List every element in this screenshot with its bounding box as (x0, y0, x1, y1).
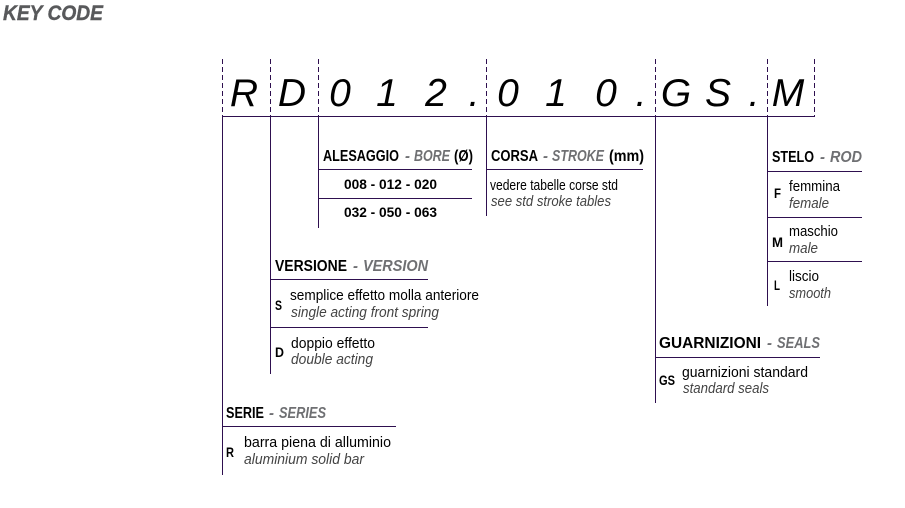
option: F: F (774, 185, 781, 201)
heading: stroke: STROKE (552, 148, 605, 165)
option: D: doppio effetto (291, 335, 375, 352)
code characters: 0 (497, 72, 519, 115)
code characters: R (230, 72, 258, 115)
code diagram: dashed separators and baseline (222, 59, 815, 116)
heading: version: VERSION (363, 258, 428, 275)
panel: stroke (486, 116, 644, 216)
panel: series (222, 116, 396, 475)
heading: bore: - (405, 148, 410, 165)
option: L: L (774, 277, 780, 293)
heading: seals (659, 335, 820, 352)
option: L (774, 268, 831, 302)
option: S: S (275, 297, 282, 313)
heading: series (226, 405, 326, 422)
heading: rod: - (820, 149, 825, 166)
option: F (774, 178, 841, 212)
panel: rod (767, 116, 862, 306)
heading: rod (772, 149, 862, 166)
code characters: 0 (595, 72, 617, 115)
heading: bore: (Ø) (454, 148, 473, 165)
option: M (772, 223, 838, 257)
code characters: 1 (545, 72, 567, 115)
option: GS: GS (659, 372, 675, 388)
heading: bore: ALESAGGIO (323, 148, 399, 165)
code characters: D (278, 72, 306, 115)
option: R: barra piena di alluminio (244, 434, 391, 451)
option: R (226, 434, 391, 468)
option: M: male (789, 240, 818, 257)
heading: rod: ROD (830, 149, 862, 166)
code characters (230, 72, 805, 115)
option: R: R (226, 444, 234, 460)
code characters: M (772, 72, 805, 115)
heading: bore (323, 148, 473, 165)
bore values row 1: 008 - 012 - 020 (344, 176, 437, 192)
code characters: 0 (329, 72, 351, 115)
option: M: M (772, 234, 783, 250)
option: GS: standard seals (683, 380, 769, 397)
code characters: G (661, 72, 691, 115)
code characters: . (636, 72, 646, 115)
heading: stroke: (mm) (609, 148, 644, 165)
heading: seals: GUARNIZIONI (659, 335, 761, 352)
heading: seals: SEALS (777, 335, 820, 352)
heading: rod: STELO (772, 149, 814, 166)
option: F: female (789, 195, 829, 212)
panel: version (270, 116, 479, 374)
heading: series: SERIES (279, 405, 326, 422)
code characters: 1 (376, 72, 398, 115)
heading: seals: - (767, 335, 772, 352)
option: L: smooth (789, 285, 831, 302)
stroke description (490, 177, 618, 210)
heading: series: SERIE (226, 405, 264, 422)
option: GS (659, 364, 808, 397)
option: GS: guarnizioni standard (682, 364, 808, 381)
option: S: single acting front spring (291, 304, 440, 321)
heading: version: - (353, 258, 358, 275)
panel: seals (655, 116, 820, 403)
code characters: S (705, 72, 731, 115)
option: S (275, 287, 479, 321)
option: L: liscio (789, 268, 819, 285)
title: KEY CODE (3, 2, 104, 25)
heading: series: - (269, 405, 274, 422)
heading: version (275, 258, 428, 275)
code characters: . (749, 72, 759, 115)
code characters: 2 (424, 72, 447, 115)
heading: bore: BORE (414, 148, 451, 165)
heading: stroke: - (543, 148, 548, 165)
stroke description: vedere tabelle corse std (490, 177, 618, 194)
heading: stroke: CORSA (491, 148, 538, 165)
code characters: . (469, 72, 479, 115)
option: F: femmina (789, 178, 841, 195)
bore values row 2: 032 - 050 - 063 (344, 204, 437, 220)
panel: bore (318, 116, 473, 228)
option: D: double acting (291, 351, 374, 368)
option: D (275, 335, 375, 368)
stroke description: see std stroke tables (491, 193, 611, 210)
option: D: D (275, 344, 284, 360)
option: M: maschio (789, 223, 838, 240)
option: R: aluminium solid bar (244, 451, 365, 468)
heading: stroke (491, 148, 644, 165)
heading: version: VERSIONE (275, 258, 347, 275)
option: S: semplice effetto molla anteriore (290, 287, 479, 304)
